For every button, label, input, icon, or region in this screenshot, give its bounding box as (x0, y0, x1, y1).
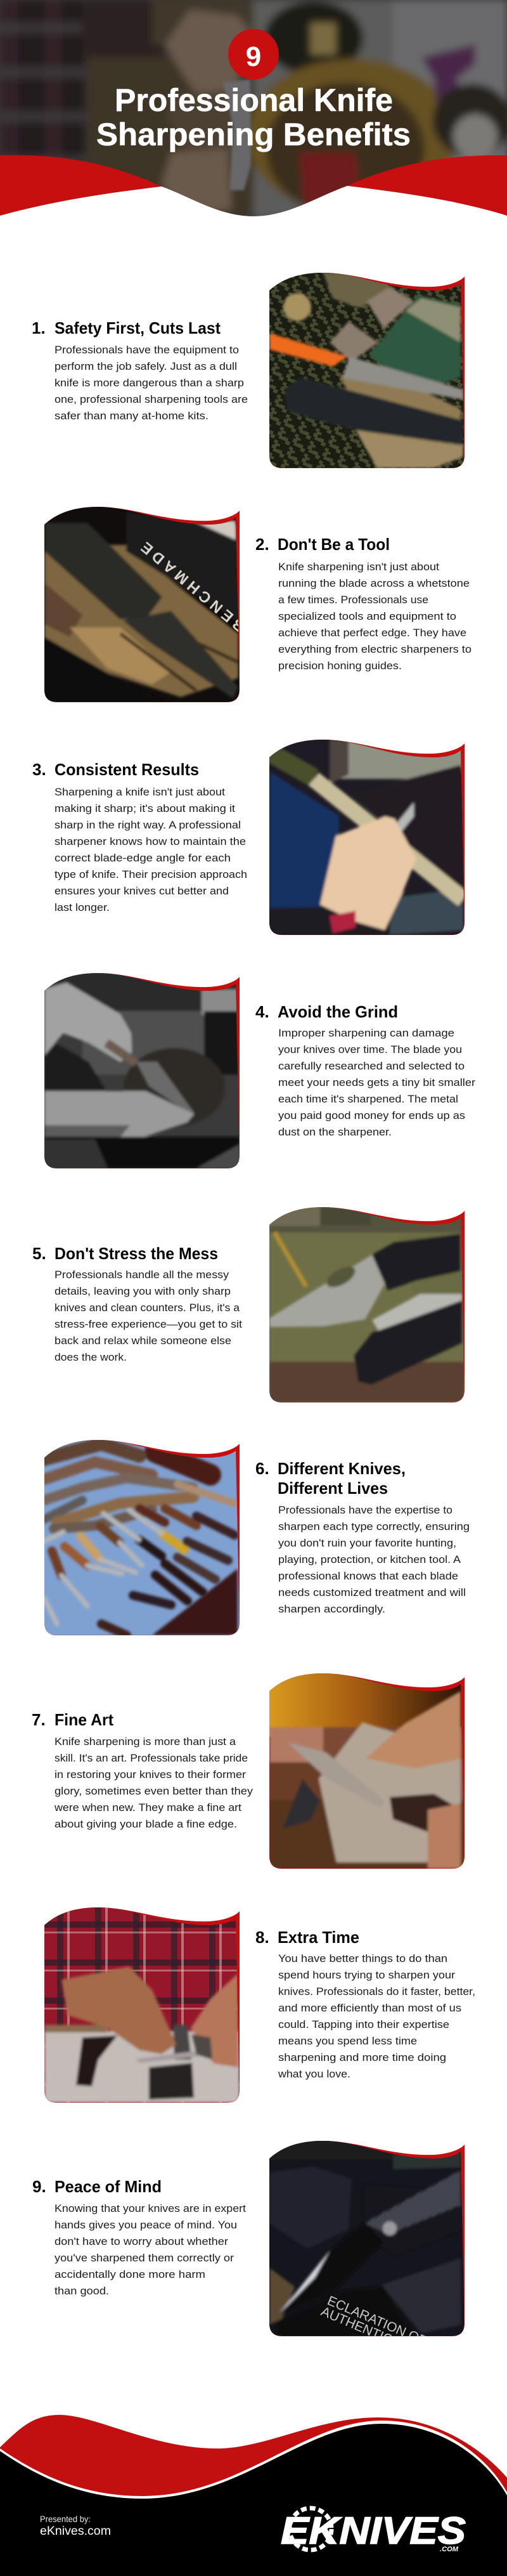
item 8 text: and more efficiently than most of us (278, 2002, 461, 2014)
item 3 text: last longer. (55, 901, 110, 913)
item 1 text: perform the job safely. Just as a dull (55, 360, 237, 372)
item 3 text: type of knife. Their precision approach (55, 868, 247, 880)
item 3 text: Sharpening a knife isn't just about (55, 786, 225, 798)
item 9 text: don't have to worry about whether (55, 2235, 228, 2247)
item 3 text: sharpener knows how to maintain the (55, 835, 246, 847)
item 1 text: 1. (32, 318, 46, 337)
item 8 text: means you spend less time (278, 2035, 417, 2047)
item 6 text: you don't ruin your favorite hunting, (278, 1537, 456, 1549)
item 8 text: Extra Time (278, 1928, 359, 1947)
item 1 text: knife is more dangerous than a sharp (55, 377, 244, 389)
item 7 text: about giving your blade a fine edge. (55, 1818, 237, 1830)
item 9 text (32, 2177, 246, 2297)
item 9 text: accidentally done more harm (55, 2268, 205, 2280)
item 9 text: you've sharpened them correctly or (55, 2252, 234, 2264)
item 6 text: Professionals have the expertise to (278, 1504, 452, 1516)
photo 4: black and white knife on a grinding wheel (44, 973, 240, 1168)
item 1 text: Professionals have the equipment to (55, 344, 239, 356)
item 4 text: dust on the sharpener. (278, 1126, 392, 1138)
item 2 text: Knife sharpening isn't just about (278, 561, 439, 573)
number badge (228, 29, 279, 80)
item 6 text: sharpen accordingly. (278, 1603, 385, 1615)
item 5 text: details, leaving you with only sharp (55, 1285, 231, 1297)
photo 5: serrated folding knives on camouflage (269, 1207, 465, 1402)
item 4 text: you paid good money for ends up as (278, 1109, 465, 1121)
item 4 text: your knives over time. The blade you (278, 1043, 462, 1056)
header white curve (0, 186, 507, 254)
item 8 text: could. Tapping into their expertise (278, 2018, 449, 2030)
item 9 text: 9. (32, 2177, 46, 2196)
item 5 text (32, 1244, 242, 1363)
item 5 text: Don't Stress the Mess (55, 1244, 218, 1263)
item 9 text: Knowing that your knives are in expert (55, 2202, 246, 2214)
item 6 text: needs customized treatment and will (278, 1586, 466, 1599)
item 9 text: hands gives you peace of mind. You (55, 2219, 237, 2231)
item 7 text: glory, sometimes even better than they (55, 1785, 254, 1797)
item 5 text: does the work. (55, 1351, 127, 1363)
photo 9: carbon fiber knife on dark pouch (269, 2141, 465, 2355)
item 2 text: a few times. Professionals use (278, 594, 428, 606)
item 8 text: what you love. (278, 2068, 350, 2080)
item 3 text: sharp in the right way. A professional (55, 819, 241, 831)
item 8 text: You have better things to do than (278, 1952, 447, 1965)
photo 6: rows of hunting knives on blue table (44, 1440, 240, 1635)
item 5 text: knives and clean counters. Plus, it's a (55, 1302, 240, 1314)
item 6 text (255, 1459, 470, 1615)
item 4 text: carefully researched and selected to (278, 1060, 465, 1072)
logo: eKnives: EKNIVES (281, 2509, 466, 2552)
footer red wave (0, 2415, 507, 2512)
item 1 text: one, professional sharpening tools are (55, 393, 248, 405)
photo 7: hands wiping a knife with cloth (269, 1673, 465, 1869)
item 6 text: Different Knives, (278, 1459, 406, 1478)
item 6 text: Different Lives (278, 1479, 388, 1498)
title: Professional Knife (115, 82, 393, 118)
item 7 text: in restoring your knives to their former (55, 1769, 246, 1781)
item 7 text: skill. It's an art. Professionals take pride (55, 1752, 248, 1764)
item 6 text: sharpen each type correctly, ensuring (278, 1520, 470, 1533)
header: darkened workshop photo (0, 0, 507, 219)
photo 9: carbon fiber knife on dark pouch: ECLARATION OF (325, 2293, 428, 2348)
item 8 text: 8. (255, 1928, 269, 1947)
item 8 text (255, 1928, 475, 2080)
item 5 text: Professionals handle all the messy (55, 1269, 229, 1281)
item 5 text: stress-free experience—you get to sit (55, 1318, 242, 1330)
item 6 text: professional knows that each blade (278, 1570, 458, 1582)
item 8 text: knives. Professionals do it faster, better, (278, 1985, 475, 1997)
item 2 text (255, 535, 472, 672)
presented by (40, 2514, 111, 2538)
photo 2: black folding knife and box (44, 507, 248, 702)
item 3 text: ensures your knives cut better and (55, 885, 229, 897)
presented by: eKnives.com (40, 2525, 111, 2538)
item 4 text: 4. (255, 1002, 269, 1021)
item 5 text: back and relax while someone else (55, 1335, 231, 1347)
item 2 text: specialized tools and equipment to (278, 610, 456, 622)
item 2 text: running the blade across a whetstone (278, 577, 470, 589)
title: Sharpening Benefits (96, 117, 411, 152)
item 3 text: Consistent Results (55, 760, 199, 779)
item 4 text: each time it's sharpened. The metal (278, 1093, 458, 1105)
item 9 text: than good. (55, 2285, 109, 2297)
photo 1: orange-handled knife on camouflage (269, 273, 465, 468)
photo 2: black folding knife and box: BENCHMADE (138, 539, 248, 635)
item 6 text: 6. (255, 1459, 269, 1478)
header red wave band (0, 155, 507, 216)
logo: eKnives: .COM (440, 2546, 459, 2553)
item 3 text (32, 760, 247, 913)
item 7 text (32, 1710, 254, 1830)
item 7 text: Knife sharpening is more than just a (55, 1736, 236, 1748)
item 2 text: precision honing guides. (278, 660, 402, 672)
photo 8: man in flannel sharpening on whetstone (44, 1907, 240, 2103)
item 6 text: playing, protection, or kitchen tool. A (278, 1553, 461, 1566)
item 7 text: 7. (32, 1710, 46, 1729)
footer white line (0, 2421, 507, 2512)
presented by: Presented by: (40, 2514, 91, 2524)
item 1 text: Safety First, Cuts Last (55, 318, 221, 337)
item 4 text: Improper sharpening can damage (278, 1027, 454, 1039)
item 3 text: making it sharp; it's about making it (55, 802, 235, 814)
item 1 text (32, 318, 248, 422)
item 4 text: Avoid the Grind (278, 1002, 398, 1021)
item 9 text: Peace of Mind (55, 2177, 162, 2196)
item 7 text: Fine Art (55, 1710, 113, 1729)
item 4 text: meet your needs gets a tiny bit smaller (278, 1076, 475, 1089)
photo 3: hand whittling a stick (269, 740, 466, 935)
item 3 text: correct blade-edge angle for each (55, 852, 231, 864)
item 7 text: were when new. They make a fine art (54, 1801, 241, 1814)
item 2 text: Don't Be a Tool (278, 535, 390, 554)
item 2 text: 2. (255, 535, 269, 554)
item 2 text: achieve that perfect edge. They have (278, 627, 466, 639)
item 2 text: everything from electric sharpeners to (278, 643, 472, 655)
photo 9: carbon fiber knife on dark pouch: AUTHENTICITY (319, 2304, 414, 2355)
footer black panel (0, 2424, 507, 2576)
item 8 text: sharpening and more time doing (278, 2051, 446, 2063)
item 3 text: 3. (32, 760, 46, 779)
item 8 text: spend hours trying to sharpen your (278, 1969, 455, 1981)
item 1 text: safer than many at-home kits. (55, 410, 209, 422)
item 5 text: 5. (32, 1244, 46, 1263)
number badge: 9 (246, 41, 261, 72)
item 4 text (255, 1002, 475, 1138)
title (96, 82, 411, 152)
